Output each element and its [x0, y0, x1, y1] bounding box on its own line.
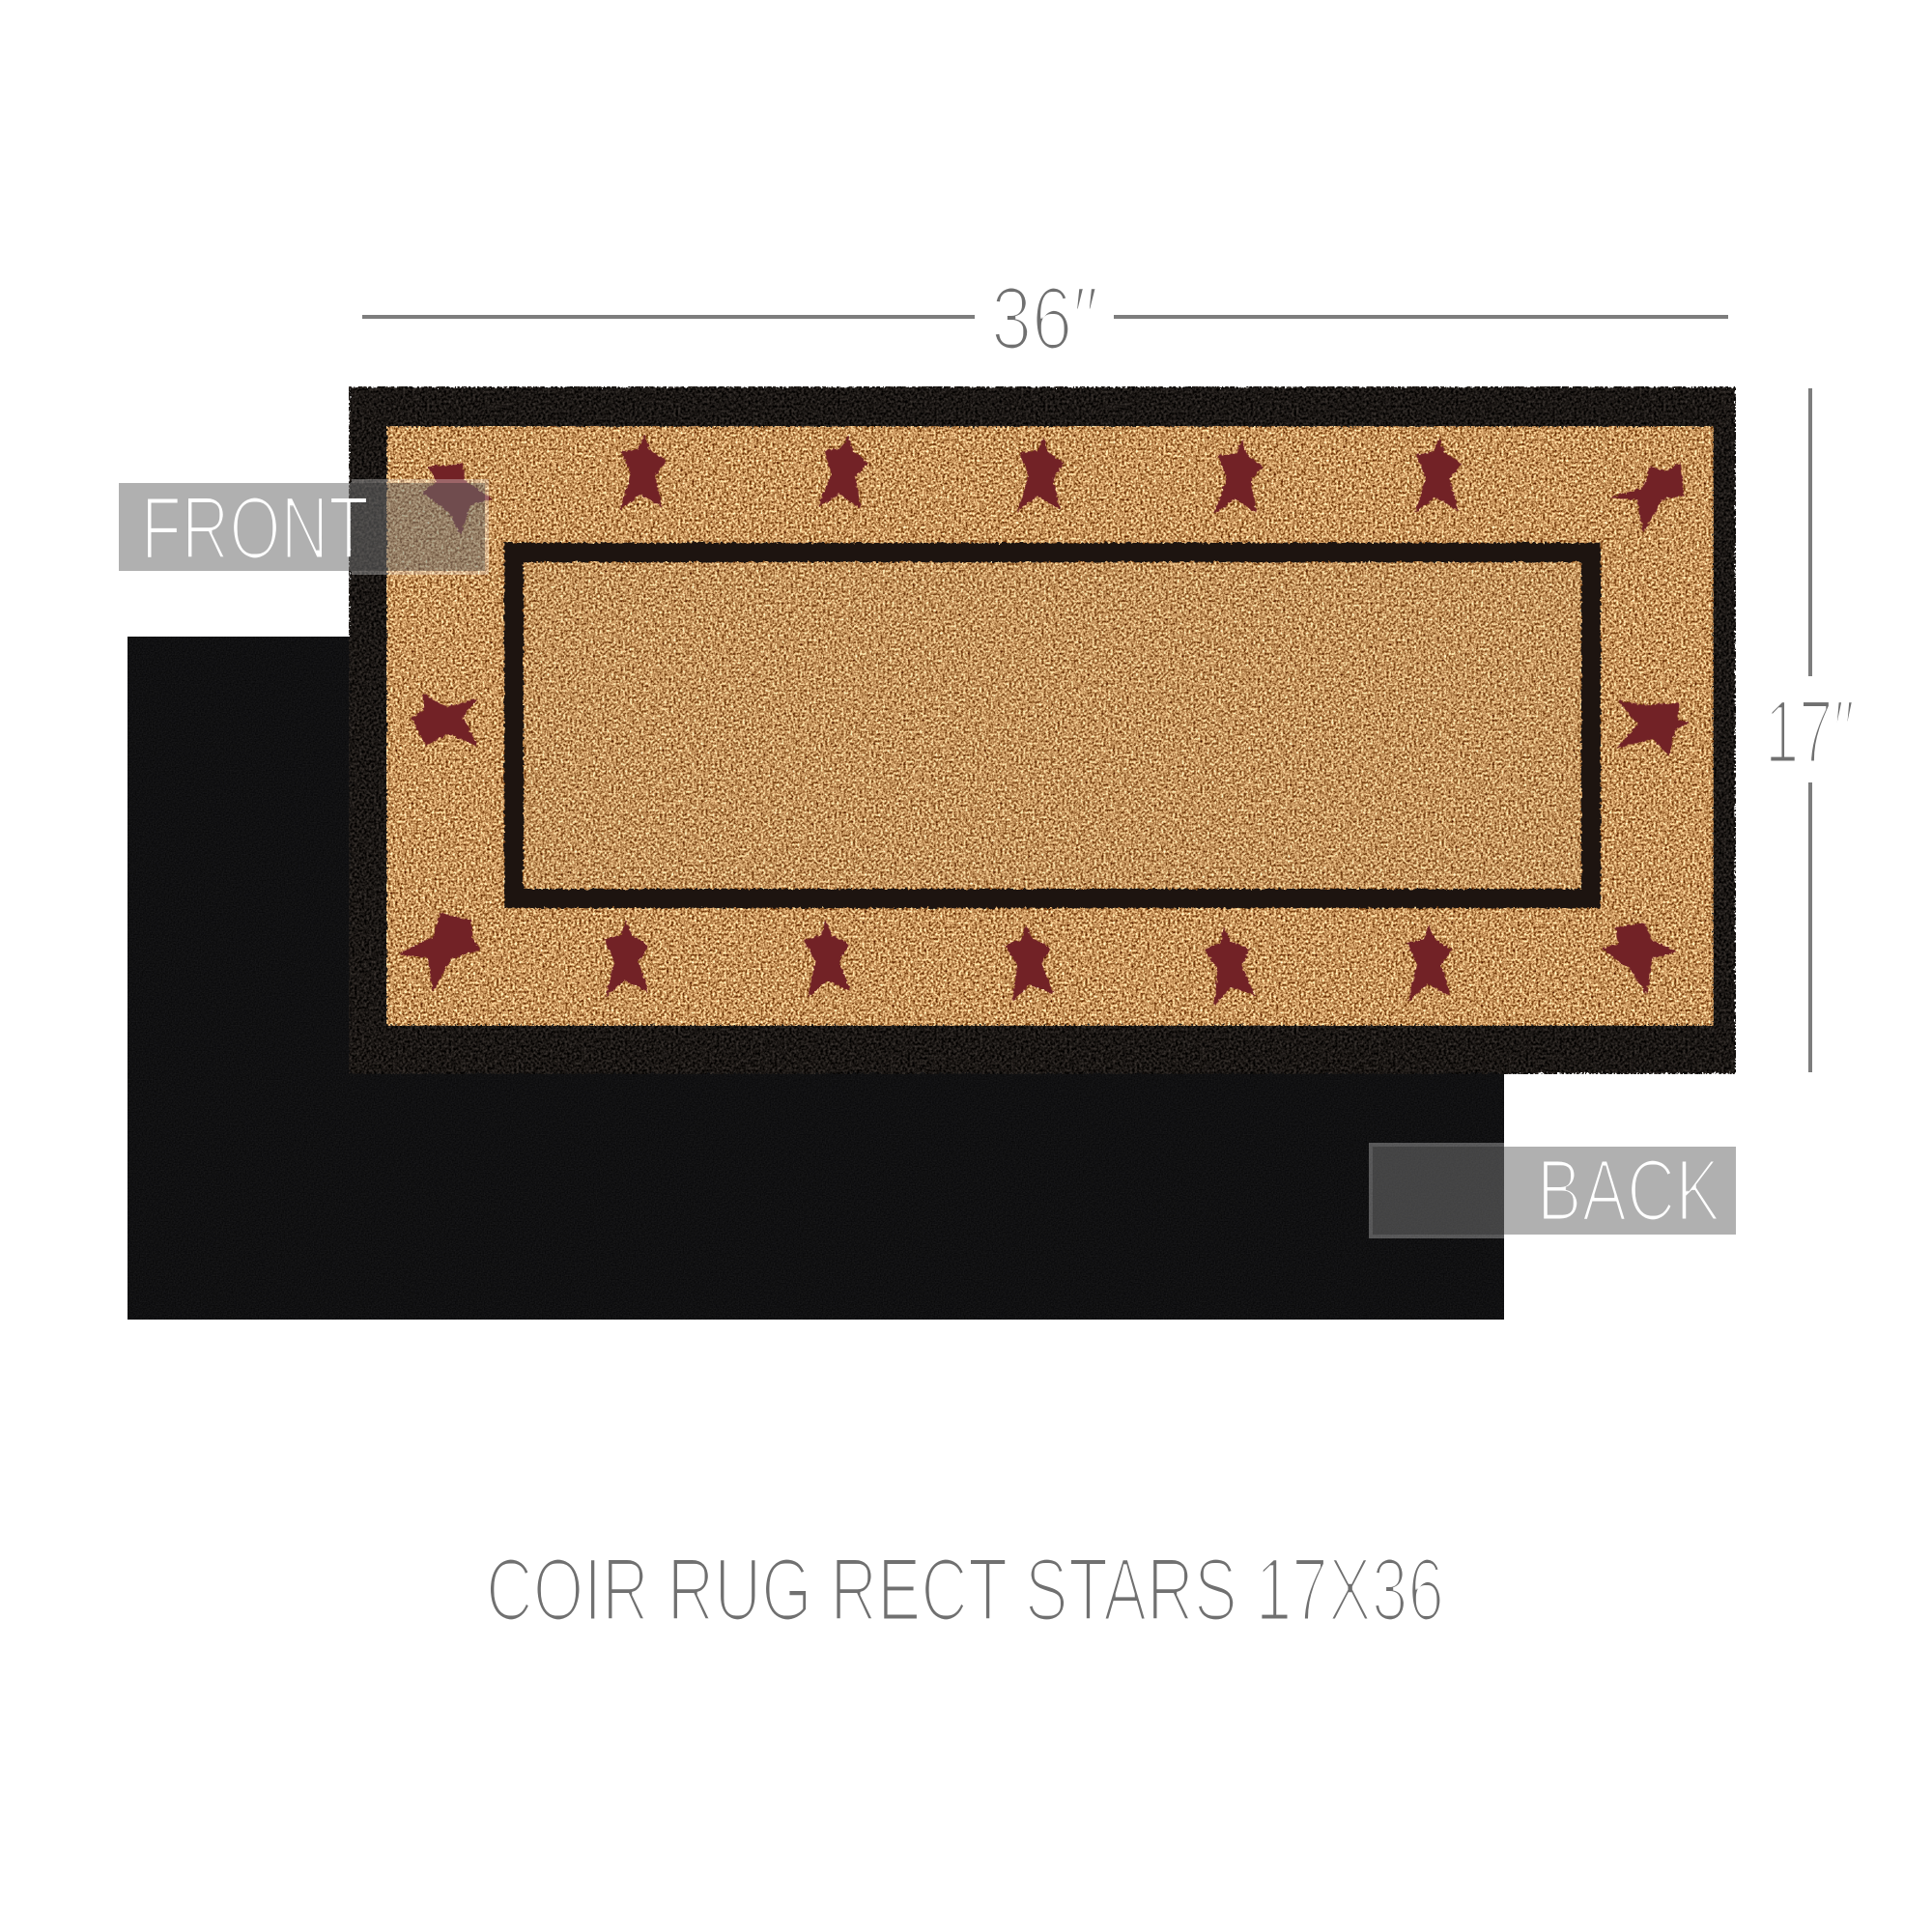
rug dark border	[349, 386, 1736, 1074]
front of rug	[349, 386, 1736, 1074]
back of rug	[128, 637, 1504, 1320]
BACK label	[1371, 1143, 1736, 1239]
product title: COIR RUG RECT STARS 17X36	[486, 1541, 1444, 1639]
height dimension: 17 inches: 17″	[1765, 683, 1855, 781]
coir field	[386, 426, 1714, 1026]
centre tone	[526, 562, 1582, 887]
BACK label: BACK	[1537, 1143, 1720, 1239]
width dimension: 36 inches: 36″	[991, 270, 1098, 368]
height dimension: 17 inches	[1765, 388, 1855, 1072]
burgundy primitive stars	[399, 432, 1690, 1007]
inner rectangle outline	[514, 553, 1591, 898]
FRONT label: FRONT	[141, 479, 369, 578]
width dimension: 36 inches	[362, 270, 1728, 368]
